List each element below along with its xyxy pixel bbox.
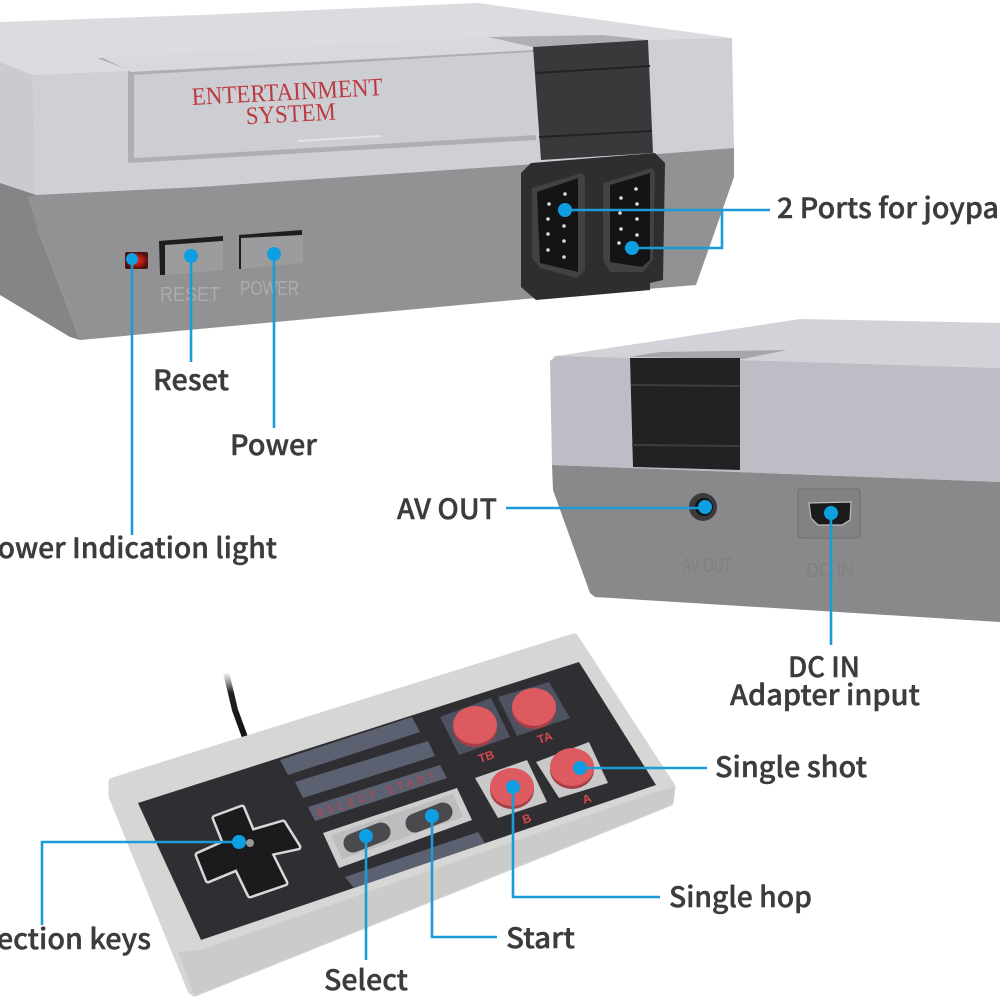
button letters xyxy=(476,729,593,827)
lid xyxy=(134,52,536,158)
button letters: TA xyxy=(535,729,555,747)
lower stripe xyxy=(345,832,485,888)
turbo A button xyxy=(498,682,570,736)
printed button labels: RESET xyxy=(160,284,220,306)
button letters: A xyxy=(580,791,593,807)
controller body xyxy=(113,638,671,992)
slot xyxy=(630,358,740,470)
DC port plate xyxy=(798,489,860,538)
DC port xyxy=(809,502,851,525)
label: AV out: AV OUT xyxy=(397,488,497,528)
AV jack xyxy=(689,493,717,521)
printed button labels: POWER xyxy=(240,278,299,300)
stripe two xyxy=(295,741,435,798)
stripe one xyxy=(280,717,420,775)
left upper side xyxy=(0,62,36,196)
d-pad xyxy=(198,808,298,895)
lower front face xyxy=(28,148,734,340)
brand text: ENTERTAINMENT xyxy=(191,74,383,111)
label: single shot: Single shot xyxy=(715,746,867,786)
port two xyxy=(603,168,655,272)
port one xyxy=(532,173,585,278)
select start plate xyxy=(323,788,472,868)
label: adapter input: Adapter input xyxy=(730,674,920,714)
turbo B button xyxy=(440,698,510,755)
joypad port block xyxy=(521,153,665,300)
start button xyxy=(415,812,443,823)
joypad slot top xyxy=(488,35,648,47)
console: front view xyxy=(0,3,734,340)
label: DC in: DC IN xyxy=(788,646,860,686)
lid crease xyxy=(97,47,536,163)
label: reset: Reset xyxy=(153,359,229,399)
button letters: TB xyxy=(476,747,496,766)
printed rear labels xyxy=(682,555,854,582)
printed button labels xyxy=(160,278,299,306)
B button xyxy=(475,760,547,818)
select start stripe xyxy=(308,765,447,821)
printed rear labels: AV OUT xyxy=(682,555,732,577)
top face xyxy=(550,319,1000,368)
face panel xyxy=(138,662,656,940)
printed rear labels: DC IN xyxy=(806,560,854,582)
controller xyxy=(113,638,675,996)
select start text: SELECT START xyxy=(315,770,437,820)
button letters: B xyxy=(520,811,533,827)
label: start: Start xyxy=(506,917,575,957)
lid notch xyxy=(298,136,381,141)
slot top xyxy=(628,350,787,359)
callout dots xyxy=(126,203,838,849)
lid top xyxy=(103,37,533,72)
label: select: Select xyxy=(324,959,408,999)
select button xyxy=(353,832,381,843)
power button xyxy=(239,230,303,269)
callout lines xyxy=(42,210,831,960)
label: single hop: Single hop xyxy=(669,876,812,916)
lower face xyxy=(552,465,1000,622)
joypad slot xyxy=(533,40,653,160)
console: rear view xyxy=(550,319,1000,622)
brand text: SYSTEM xyxy=(245,99,336,130)
power indicator LED xyxy=(125,252,148,269)
body front edge shading xyxy=(178,787,675,996)
left lower side xyxy=(0,183,80,340)
cord xyxy=(226,672,246,740)
port pins xyxy=(546,187,639,259)
brand text xyxy=(191,74,384,133)
reset button xyxy=(159,236,223,275)
front upper face xyxy=(550,356,1000,482)
front upper face xyxy=(33,38,734,197)
label: power: Power xyxy=(230,424,318,464)
A button xyxy=(536,742,608,798)
top face xyxy=(0,3,732,75)
